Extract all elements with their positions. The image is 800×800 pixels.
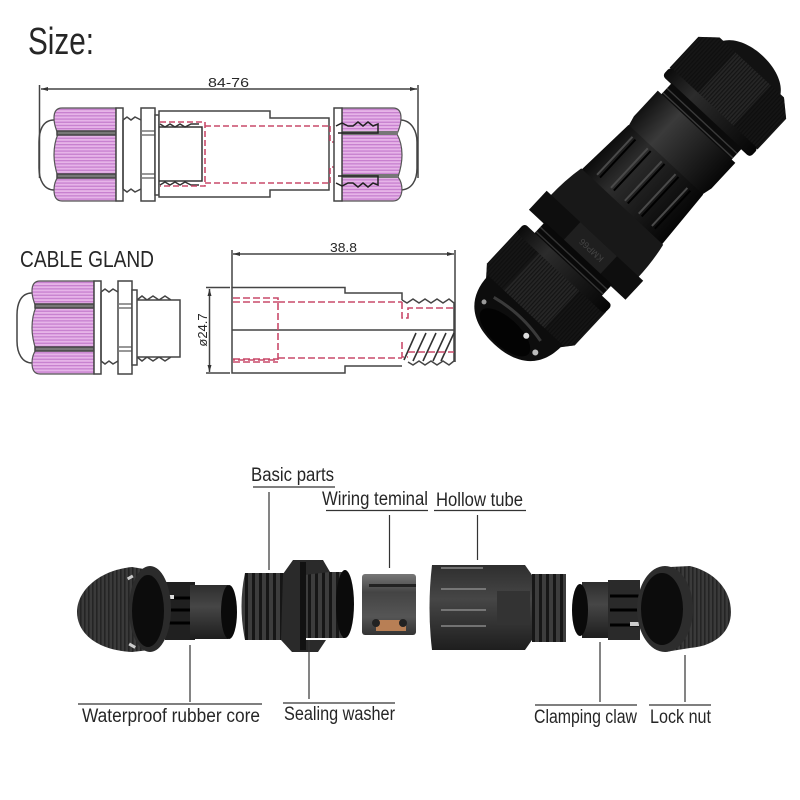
ring — [550, 166, 666, 278]
dimension: 84-76 — [40, 75, 418, 178]
top collar and thread — [651, 67, 758, 169]
diagram: cable gland section — [195, 240, 455, 373]
hex washer — [529, 191, 643, 300]
part: lock nut left — [77, 566, 171, 652]
dimension: 38.8 — [232, 240, 455, 362]
callout: hollow tube: Hollow tube — [436, 490, 523, 511]
smooth tube — [626, 91, 735, 197]
front dome — [457, 276, 563, 379]
lower thread — [533, 222, 612, 298]
lower nut — [479, 223, 612, 354]
label: cable gland: CABLE GLAND — [20, 246, 154, 272]
callout: clamping claw — [534, 642, 637, 728]
ribbed sleeve — [581, 122, 706, 245]
right gland nut — [334, 108, 417, 201]
hex washer: KMP66 — [577, 236, 606, 264]
dimension: 38.8: 38.8 — [330, 240, 357, 255]
part: clamping core left — [165, 582, 237, 640]
gland nut — [17, 281, 101, 374]
callout: wiring terminal: Wiring teminal — [322, 489, 428, 510]
part: hollow tube — [430, 565, 566, 650]
photo: assembled black connector — [446, 11, 800, 389]
gland thread and washer — [101, 281, 180, 374]
left gland nut — [39, 108, 123, 201]
gland body outline — [232, 288, 454, 373]
threads and washer — [123, 108, 159, 201]
part: basic parts body — [242, 560, 354, 652]
callout: sealing washer — [283, 640, 396, 725]
part: lock nut right — [637, 566, 731, 652]
heading: Size: Size: — [28, 21, 94, 63]
diagram: full connector dimensions — [39, 75, 418, 201]
callout: waterproof rubber core — [78, 645, 262, 727]
callout: hollow tube — [434, 490, 526, 560]
callout: basic parts: Basic parts — [251, 465, 334, 486]
central tube — [159, 111, 336, 197]
callout: lock nut: Lock nut — [650, 707, 712, 728]
callout: wiring terminal — [322, 489, 428, 568]
part: clamping claw right — [572, 580, 640, 640]
part: wiring terminal — [362, 574, 416, 635]
callout: basic parts — [251, 465, 335, 570]
callout: sealing washer: Sealing washer — [284, 704, 396, 725]
callout: lock nut — [649, 655, 712, 728]
diagram: cable gland outer view — [17, 281, 180, 374]
dimension: 84-76: 84-76 — [208, 75, 249, 90]
dimension: diameter 24.7 — [195, 288, 230, 373]
exploded parts row — [77, 560, 731, 652]
callout: clamping claw: Clamping claw — [534, 707, 637, 728]
top nut — [670, 27, 796, 149]
callout: waterproof rubber core: Waterproof rubber core — [82, 706, 260, 727]
dimension: diameter 24.7: ø24.7 — [195, 313, 210, 347]
top end dome — [717, 27, 793, 101]
